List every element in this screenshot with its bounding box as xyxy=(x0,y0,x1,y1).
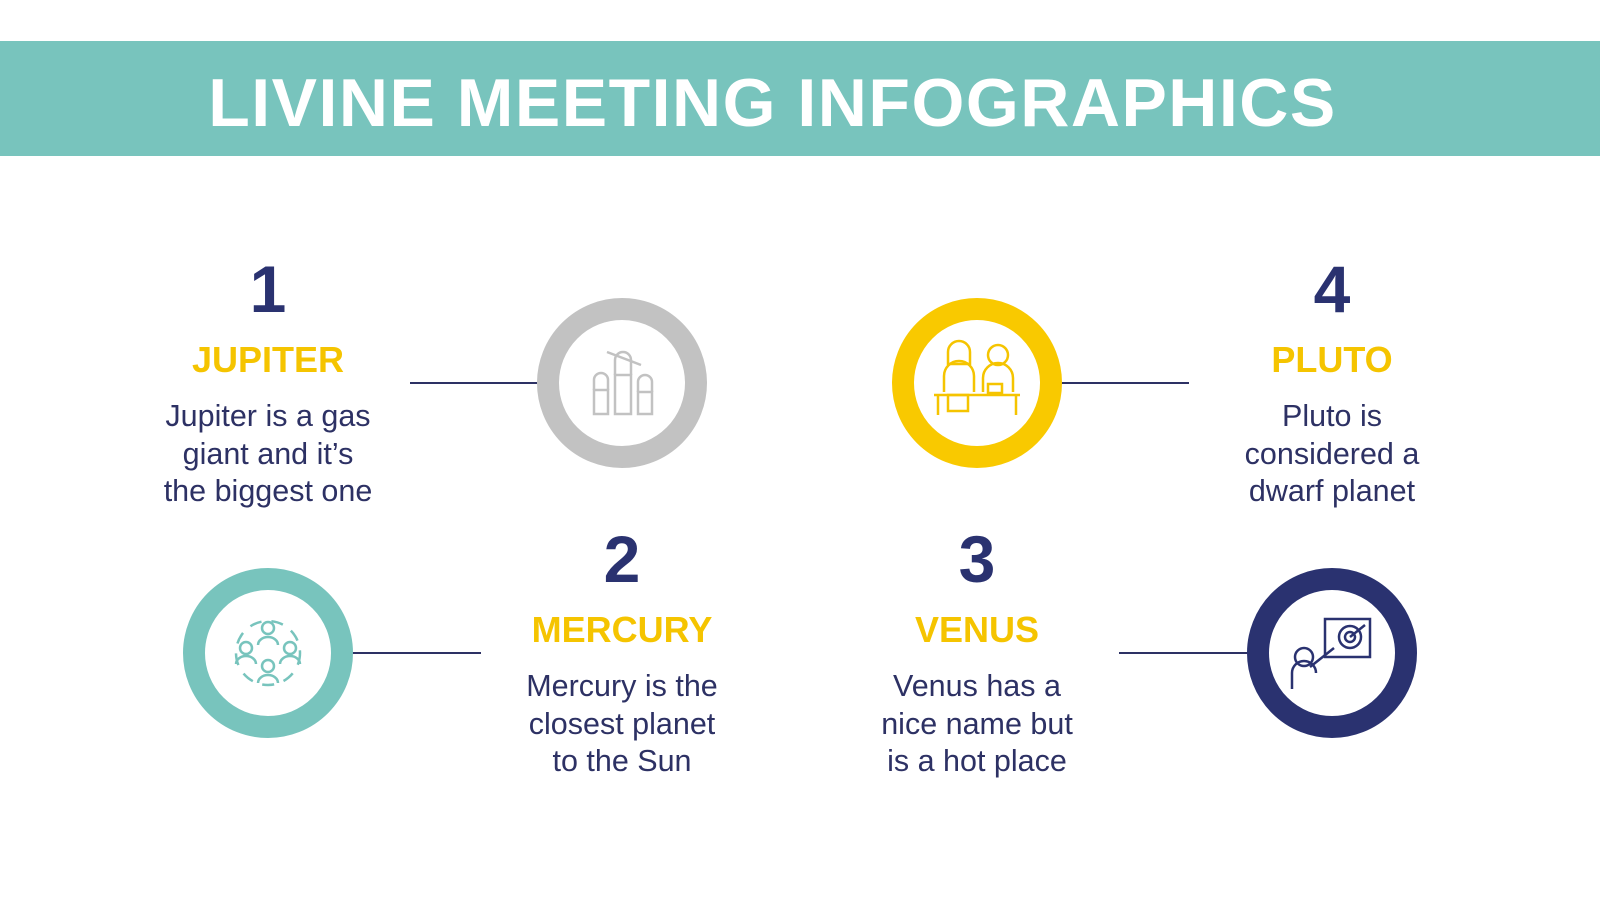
icon: raised hands (gray circle) xyxy=(548,309,696,457)
icon: team network (teal circle) xyxy=(194,579,342,727)
item 2: Mercury xyxy=(526,522,718,778)
item 3: Venus xyxy=(881,522,1073,778)
title: LIVINE MEETING INFOGRAPHICS xyxy=(208,65,1337,141)
item 2: Mercury: closest planet xyxy=(529,706,715,740)
item 4: Pluto: Pluto is xyxy=(1282,399,1382,433)
item 3: Venus: 3 xyxy=(959,522,995,596)
item 4: Pluto: considered a xyxy=(1245,436,1419,470)
icon: meeting people (yellow circle) xyxy=(903,309,1051,457)
icon: presenter with target (navy circle) xyxy=(1258,579,1406,727)
item 3: Venus: is a hot place xyxy=(887,744,1067,778)
item 1: Jupiter: the biggest one xyxy=(164,474,372,508)
item 3: Venus: VENUS xyxy=(915,609,1039,650)
item 2: Mercury: to the Sun xyxy=(552,744,692,778)
title banner xyxy=(0,41,1600,156)
item 4: Pluto: PLUTO xyxy=(1271,339,1393,380)
item 2: Mercury: 2 xyxy=(604,522,640,596)
item 3: Venus: nice name but xyxy=(881,706,1073,740)
item 1: Jupiter: Jupiter is a gas xyxy=(165,399,371,433)
item 3: Venus: Venus has a xyxy=(893,669,1061,703)
connector lines xyxy=(352,383,1247,653)
item 1: Jupiter: giant and it’s xyxy=(183,436,353,470)
item 2: Mercury: Mercury is the xyxy=(526,669,718,703)
item 4: Pluto: 4 xyxy=(1314,252,1350,326)
item 1: Jupiter: JUPITER xyxy=(192,339,344,380)
item 2: Mercury: MERCURY xyxy=(532,609,712,650)
item 4: Pluto xyxy=(1245,252,1420,508)
item 1: Jupiter: 1 xyxy=(250,252,286,326)
item 1: Jupiter xyxy=(164,252,372,508)
item 4: Pluto: dwarf planet xyxy=(1249,474,1415,508)
